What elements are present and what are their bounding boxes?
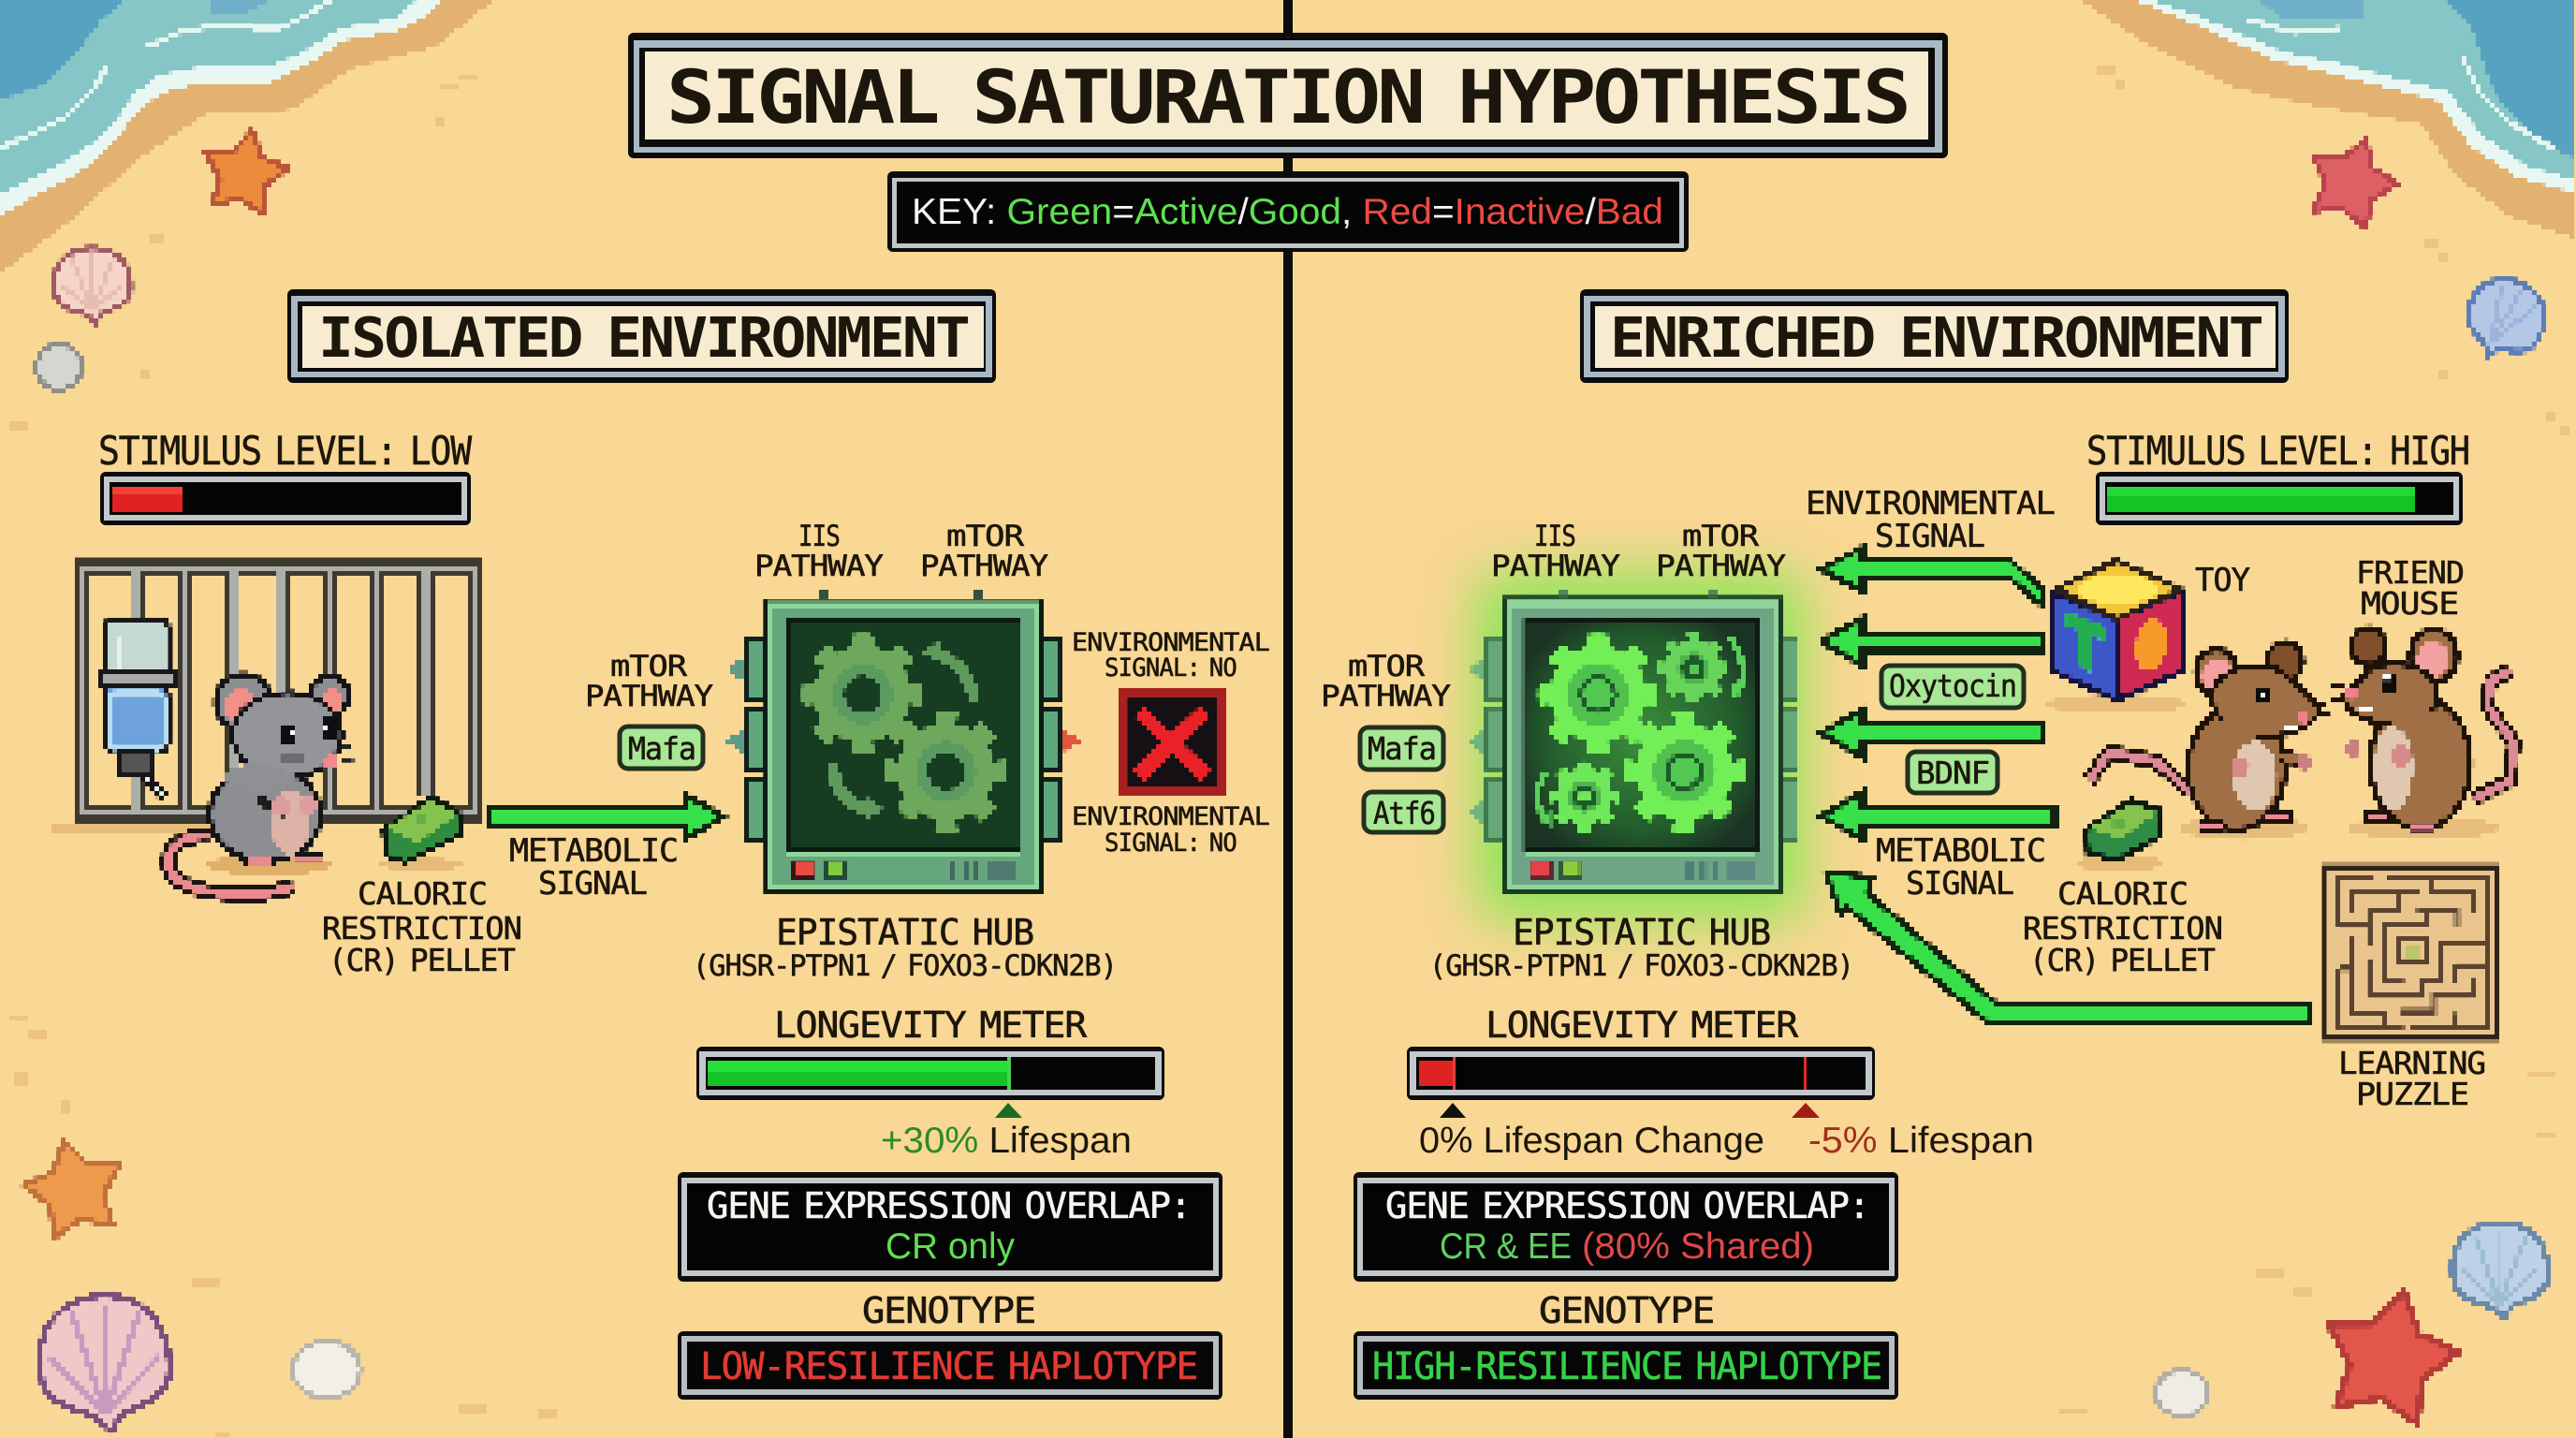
caloric restriction label: RESTRICTION [2023, 910, 2222, 946]
epistatic hub: inactive [725, 588, 1081, 894]
gears: inactive [799, 631, 1009, 834]
metabolic signal label: METABOLIC [509, 832, 678, 870]
pathway label: left: mTOR [610, 650, 687, 683]
caloric restriction label: (CR) PELLET [2029, 942, 2216, 978]
starfish: red lower right [2312, 1277, 2468, 1429]
toy label: TOY [2195, 562, 2250, 599]
heading: enriched: ENRICHED ENVIRONMENT [1610, 305, 2261, 370]
pathway labels: top: PATHWAY [754, 550, 884, 583]
environmental signal label: ENVIRONMENTAL [1806, 485, 2055, 522]
stimulus bar high [2096, 472, 2463, 525]
heading: isolated [287, 289, 996, 383]
shell: blue upper right [2452, 266, 2557, 373]
environmental signal label [1806, 485, 2055, 555]
pathway label: left [585, 650, 713, 713]
friend mouse [2330, 628, 2514, 839]
starfish: orange lower left [16, 1130, 131, 1241]
pathway labels: top [1491, 520, 1786, 583]
environmental signal no: bottom: SIGNAL: NO [1105, 829, 1237, 858]
Mafa gene tag: Mafa [1368, 730, 1436, 767]
friend mouse label [2356, 554, 2464, 622]
pathway labels: top: PATHWAY [1491, 550, 1620, 583]
shell: purple [39, 1296, 169, 1431]
pebble: grey [37, 345, 81, 389]
arrow: metabolic signal [1822, 792, 2055, 839]
environmental signal no: top [1072, 628, 1270, 682]
environmental signal no: top: SIGNAL: NO [1105, 653, 1237, 682]
environmental signal no: bottom: ENVIRONMENTAL [1072, 802, 1270, 831]
epistatic hub label: (GHSR-PTPN1 / FOXO3-CDKN2B) [693, 949, 1117, 983]
arrow: environmental signal [1822, 548, 2042, 605]
gene expression overlap: CR & EE [1440, 1226, 1572, 1267]
pathway label: left [1321, 650, 1451, 713]
ocean: top right [2081, 0, 2576, 239]
title text: SIGNAL SATURATION HYPOTHESIS [666, 56, 1908, 140]
pathway labels: top: IIS [1534, 520, 1575, 553]
starfish: orange top [197, 124, 293, 216]
pathway labels: top: PATHWAY [1656, 550, 1786, 583]
genotype label: GENOTYPE [1539, 1290, 1714, 1331]
inactive X indicator [1121, 692, 1222, 790]
genotype box [678, 1331, 1222, 1400]
stimulus bar low [100, 472, 471, 525]
metabolic signal label: METABOLIC [1876, 832, 2045, 870]
genotype label: GENOTYPE [862, 1290, 1035, 1331]
stimulus label high: STIMULUS LEVEL: HIGH [2086, 428, 2469, 474]
genotype box: LOW-RESILIENCE HAPLOTYPE [700, 1345, 1197, 1388]
panel: isolated environment [50, 289, 1270, 1400]
pixel art group: left [50, 562, 1222, 894]
pathway labels: top: IIS [798, 520, 840, 553]
ocean: top left [0, 0, 493, 273]
marker triangle: minus five [1792, 1103, 1820, 1118]
environmental signal no: bottom [1072, 802, 1270, 858]
gene expression overlap: (80% Shared) [1582, 1226, 1814, 1267]
epistatic hub label: (GHSR-PTPN1 / FOXO3-CDKN2B) [1429, 949, 1853, 983]
cage [77, 562, 481, 820]
caloric restriction label [322, 875, 521, 978]
gears: active [1535, 631, 1748, 834]
friend mouse label: MOUSE [2361, 585, 2458, 622]
epistatic hub label [693, 912, 1117, 983]
panel: enriched environment [1321, 289, 2514, 1400]
pathway labels: top [754, 520, 1048, 583]
pebble: white [293, 1342, 360, 1398]
epistatic hub label: EPISTATIC HUB [776, 912, 1033, 953]
genotype box: HIGH-RESILIENCE HAPLOTYPE [1372, 1345, 1881, 1388]
learning puzzle label: PUZZLE [2356, 1076, 2468, 1112]
starfish: red upper right [2297, 125, 2408, 233]
CR pellet [381, 798, 461, 871]
lifespan decrease readout: -5% Lifespan [1808, 1121, 2034, 1161]
environmental signal no: top: ENVIRONMENTAL [1072, 628, 1270, 657]
heading: enriched [1580, 289, 2289, 383]
lifespan readout: +30% Lifespan [881, 1121, 1132, 1161]
caloric restriction label: (CR) PELLET [329, 942, 516, 978]
arrows [1822, 548, 2311, 1024]
metabolic signal label [509, 832, 678, 902]
genotype box [1354, 1331, 1898, 1400]
colour key [887, 171, 1689, 252]
gene expression overlap: GENE EXPRESSION OVERLAP: [1385, 1185, 1869, 1226]
pathway label: left: PATHWAY [1321, 680, 1451, 713]
BDNF tag: BDNF [1916, 755, 1989, 791]
pixel art group: right [1470, 548, 2514, 1038]
gene expression overlap [678, 1172, 1222, 1282]
arrow: BDNF [1822, 710, 2043, 757]
hub glow [1479, 576, 1802, 917]
marker triangle: zero [1440, 1103, 1466, 1118]
arrow: learning puzzle [1826, 873, 2311, 1024]
shell: pink [54, 248, 130, 323]
metabolic signal label [1876, 832, 2045, 902]
lifespan change readout: 0% Lifespan Change [1419, 1121, 1764, 1161]
learning puzzle label [2338, 1045, 2485, 1112]
pathway labels: top: mTOR [946, 520, 1024, 553]
BDNF tag [1908, 752, 1998, 793]
gene expression overlap [1354, 1172, 1898, 1282]
friend mouse label: FRIEND [2356, 554, 2464, 591]
epistatic hub label [1429, 912, 1853, 983]
pathway label: left: mTOR [1348, 650, 1425, 683]
caloric restriction label: RESTRICTION [322, 910, 521, 946]
Atf6 gene tag: Atf6 [1373, 795, 1435, 831]
pathway labels: top: mTOR [1682, 520, 1759, 553]
learning puzzle label: LEARNING [2338, 1045, 2485, 1081]
metabolic signal label: SIGNAL [1906, 865, 2013, 902]
gene expression overlap: GENE EXPRESSION OVERLAP: [707, 1185, 1191, 1226]
Mafa gene tag: Mafa [628, 730, 695, 767]
longevity meter bar [1407, 1047, 1875, 1100]
CR pellet [2076, 800, 2163, 872]
heading: isolated: ISOLATED ENVIRONMENT [318, 305, 968, 370]
shell: blue lower right [2452, 1223, 2548, 1318]
key text: KEY: Green=Active/Good, Red=Inactive/Bad [912, 192, 1663, 232]
center divider [1283, 0, 1293, 1438]
longevity meter label: LONGEVITY METER [1486, 1005, 1798, 1046]
epistatic hub: active [1470, 588, 1797, 896]
arrow: oxytocin [1822, 618, 2042, 666]
cube toy [2046, 561, 2187, 713]
gene expression overlap: CR only [886, 1226, 1015, 1267]
pathway labels: top: PATHWAY [920, 550, 1048, 583]
title banner [628, 33, 1948, 158]
stimulus label low: STIMULUS LEVEL: LOW [98, 428, 473, 474]
marker triangle [995, 1103, 1022, 1118]
longevity meter bar [696, 1047, 1164, 1100]
caloric restriction label: CALORIC [358, 875, 487, 912]
Oxytocin tag: Oxytocin [1889, 668, 2016, 704]
caloric restriction label [2023, 875, 2222, 978]
pebble: lower right [2156, 1371, 2208, 1416]
water bottle [99, 620, 174, 798]
grey mouse in cage [50, 675, 353, 894]
metabolic arrow [490, 795, 723, 839]
environmental signal label: SIGNAL [1875, 518, 1984, 555]
longevity meter label: LONGEVITY METER [774, 1005, 1087, 1046]
metabolic signal label: SIGNAL [538, 865, 647, 902]
learning puzzle maze [2326, 867, 2498, 1038]
pathway label: left: PATHWAY [585, 680, 713, 713]
brown mouse [2089, 642, 2328, 840]
epistatic hub label: EPISTATIC HUB [1513, 912, 1770, 953]
caloric restriction label: CALORIC [2057, 875, 2188, 912]
